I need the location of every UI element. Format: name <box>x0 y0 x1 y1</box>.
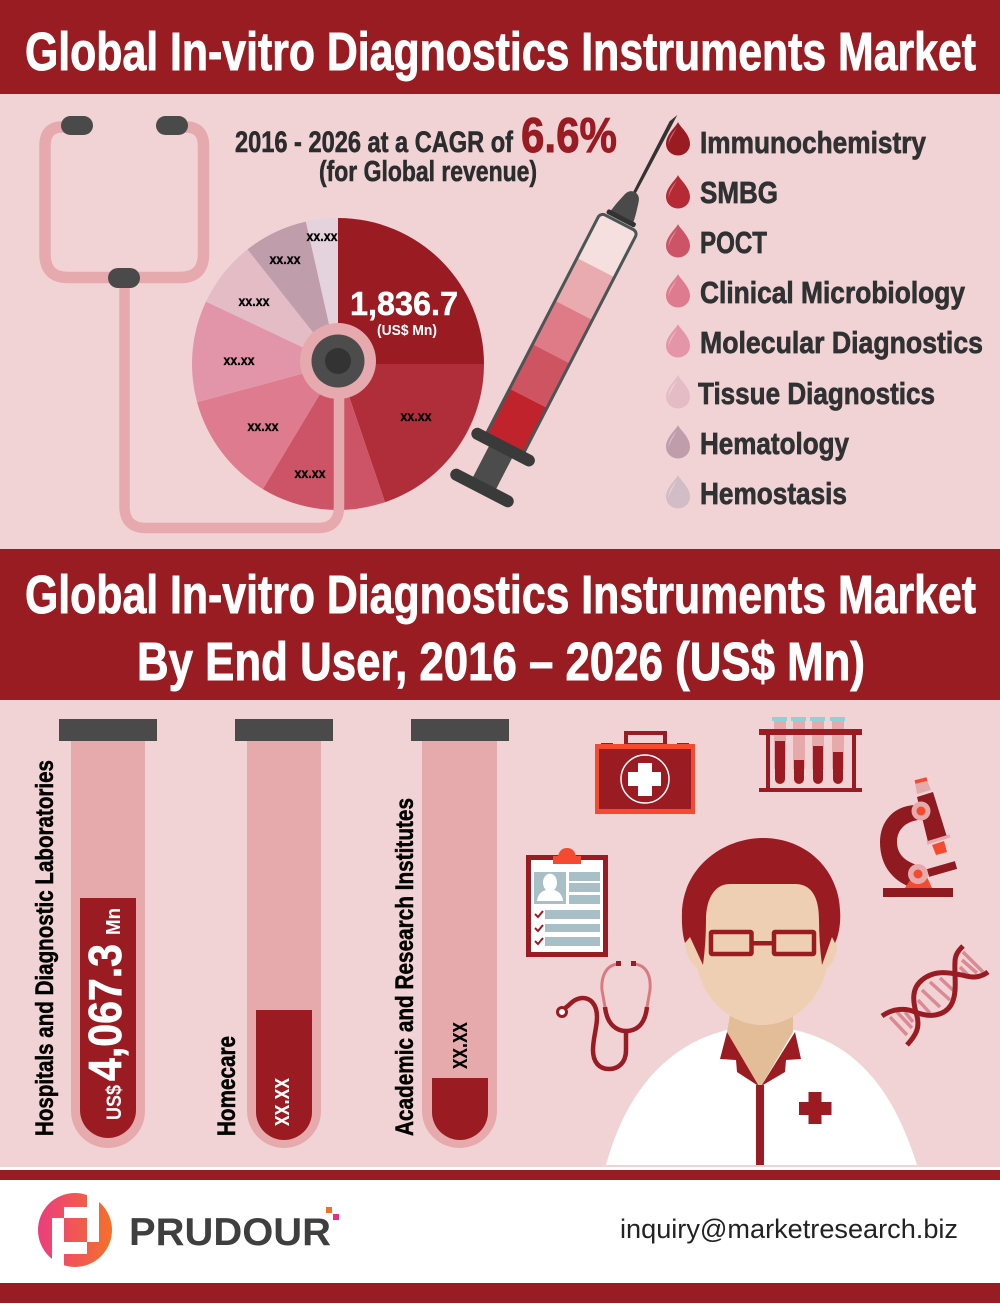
pie chart: xx.xx <box>238 293 270 309</box>
pie chart: xx.xx <box>270 251 301 267</box>
icon: syringe <box>448 98 706 509</box>
legend item: SMBG: SMBG <box>700 175 778 210</box>
legend <box>666 122 983 511</box>
legend item: Hemostasis <box>666 475 847 511</box>
legend item: SMBG <box>666 175 778 210</box>
icon: small stethoscope <box>558 961 650 1069</box>
pie chart: 1,836.7 <box>350 285 458 322</box>
tube: homecare: Homecare <box>213 1036 241 1136</box>
icon: DNA helix <box>882 946 988 1045</box>
CAGR heading: 2016 - 2026 at a CAGR of <box>235 126 514 159</box>
doctor figure <box>606 838 917 1165</box>
CAGR heading: (for Global revenue) <box>319 156 537 188</box>
tube: hospitals and diagnostic laboratories: US$ <box>103 1085 126 1120</box>
icon: clipboard <box>526 848 608 957</box>
icon: medical kit <box>595 733 695 814</box>
legend item: Hemostasis: Hemostasis <box>700 476 847 511</box>
pie chart: xx.xx <box>400 408 432 424</box>
CAGR heading: 6.6% <box>521 109 617 163</box>
contact email: inquiry@marketresearch.biz <box>620 1214 958 1244</box>
legend item: Immunochemistry: Immunochemistry <box>700 125 927 160</box>
pie chart <box>192 218 484 510</box>
pie chart: xx.xx <box>306 228 338 244</box>
tube: hospitals and diagnostic laboratories: Mn <box>103 908 125 935</box>
tube: hospitals and diagnostic laboratories: Hospitals and Diagnostic Laboratories <box>31 760 59 1136</box>
legend item: Hematology <box>666 425 850 461</box>
tube: hospitals and diagnostic laboratories <box>31 719 157 1148</box>
CAGR heading <box>235 109 617 188</box>
legend item: POCT <box>666 224 767 260</box>
title banner <box>0 0 1000 94</box>
pie chart: xx.xx <box>248 418 279 434</box>
legend item: Hematology: Hematology <box>700 426 850 461</box>
pie chart: xx.xx <box>294 465 326 481</box>
legend item: POCT: POCT <box>700 225 767 260</box>
logo: Prudour <box>38 1190 339 1270</box>
icon: large stethoscope <box>45 116 376 528</box>
icon: microscope <box>880 779 956 897</box>
legend item: Tissue Diagnostics: Tissue Diagnostics <box>698 376 935 411</box>
section banner <box>0 549 1000 700</box>
tube: homecare <box>213 719 333 1148</box>
tube: hospitals and diagnostic laboratories: 4,067.3 <box>79 944 131 1081</box>
footer <box>0 1167 1000 1304</box>
tube: academic and research institutes <box>391 719 509 1148</box>
logo: Prudour: PRUDOUR <box>129 1211 331 1254</box>
icon: test tube rack <box>759 717 862 792</box>
tube: homecare: xx.xx <box>265 1078 295 1126</box>
tube: academic and research institutes: Academic and Research Institutes <box>391 798 419 1136</box>
tube: academic and research institutes: xx.xx <box>443 1022 473 1069</box>
pie chart: xx.xx <box>224 352 255 368</box>
pie chart: (US$ Mn) <box>377 322 437 339</box>
